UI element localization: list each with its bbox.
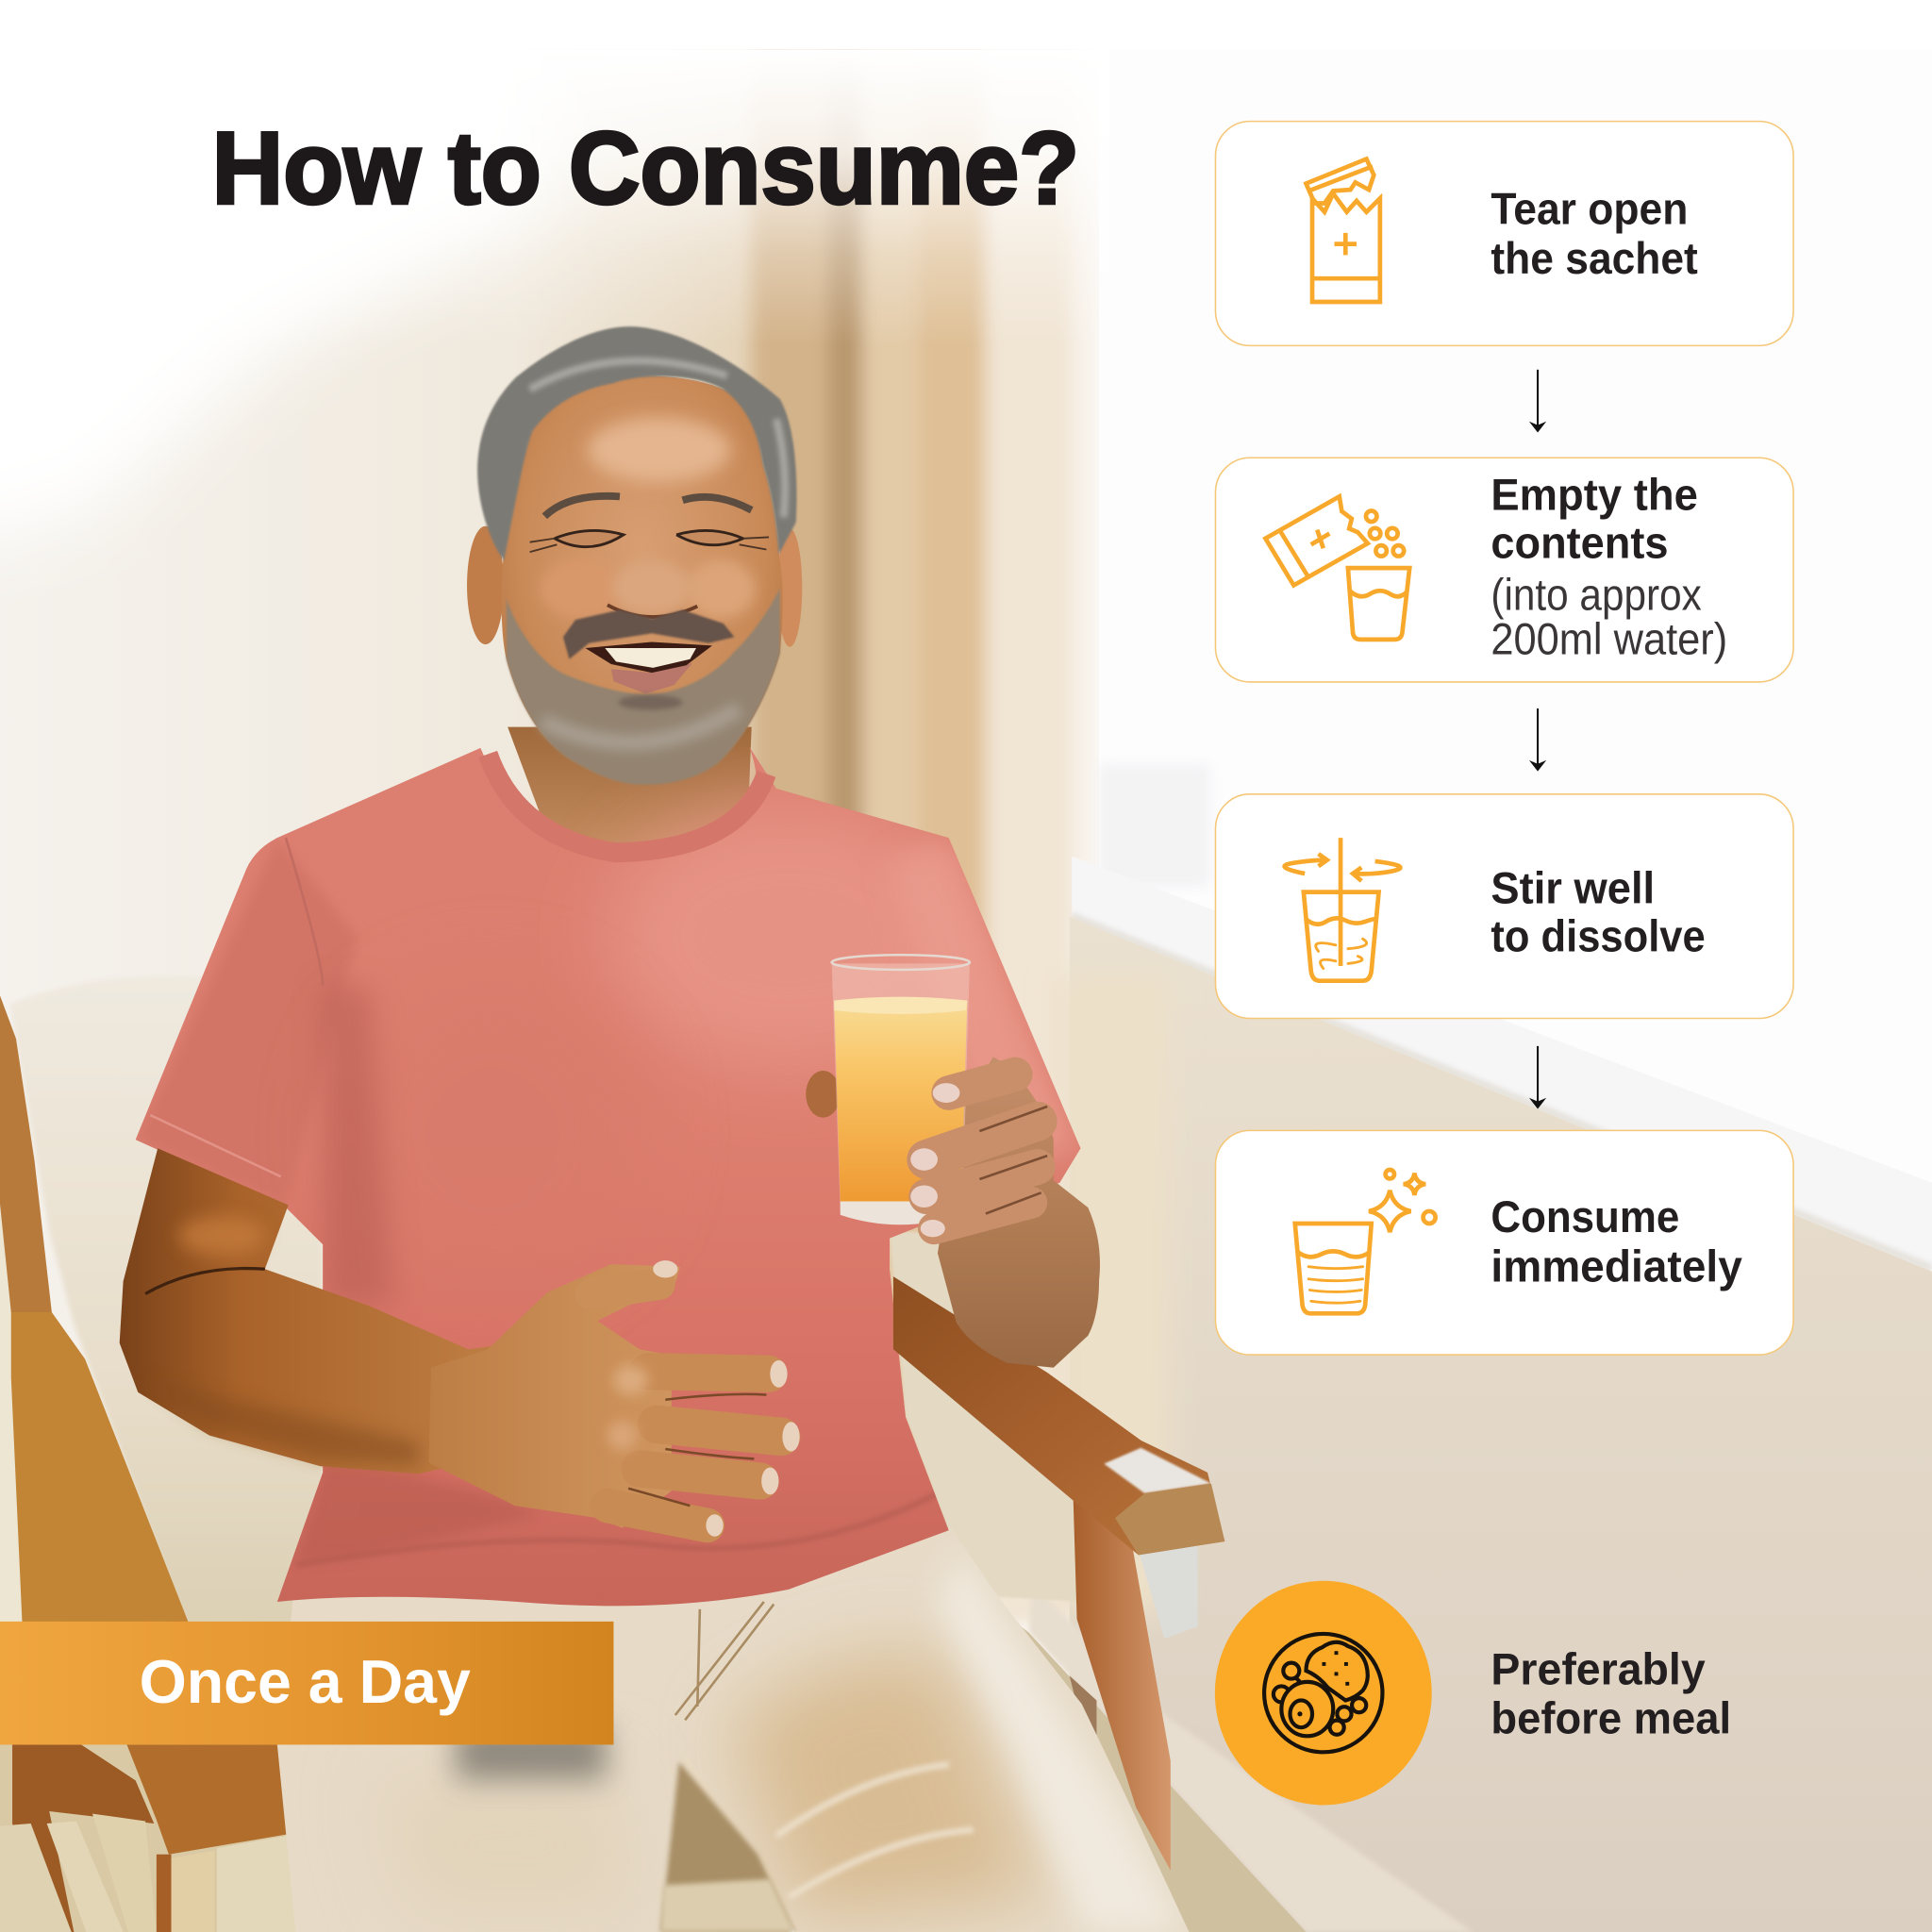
nails [653,1260,800,1537]
cheek highlight [540,559,619,619]
title: How to Consume? [212,111,1079,225]
step text [1491,184,1698,283]
sill edge [1072,912,1932,1274]
icon: glass with sparkles [1295,1170,1436,1313]
head [467,326,802,785]
chair arm right [893,1276,1224,1555]
arrow 3 [1529,1046,1546,1109]
left body shade [323,986,394,1306]
chair back cushion [9,976,323,1626]
meal text: Preferably [1491,1643,1706,1693]
icon: plate of food [1264,1634,1382,1752]
eyebrows [544,496,752,516]
step card 2: empty contents [1215,458,1793,682]
collar [488,754,766,853]
nostril shadow [608,605,697,617]
mouth [585,641,712,673]
man [120,326,1224,1932]
meal text [1491,1643,1731,1743]
arm white highlight [1104,1448,1211,1493]
soul patch [619,695,683,709]
icon: stirring glass [1285,838,1400,981]
left upper arm and forearm [120,1148,518,1474]
step text: (into approx [1491,570,1702,620]
wall shading near chair [1059,974,1171,1614]
nose [612,560,691,615]
forearm shade [148,1380,419,1466]
t-shirt [136,747,1080,1606]
glass [832,955,970,1224]
chair weave [1070,1675,1096,1774]
shoulder seam [286,838,323,986]
chair [0,976,1198,1932]
beard grey [542,708,740,742]
step text: Stir well [1491,862,1655,912]
seat cream [660,1879,794,1932]
left white glow [0,0,542,555]
step card 1: tear open [1215,122,1793,345]
far left cream edge [0,1183,23,1750]
window frame shade [1099,764,1210,887]
meal text: before meal [1491,1693,1731,1743]
banner: once a day [0,1622,613,1744]
right forearm [938,1058,1100,1368]
seat gap [660,1762,794,1932]
knuckle highlights [613,1365,648,1395]
floor [974,1590,1306,1932]
step text: Tear open [1491,184,1688,234]
step text: contents [1491,518,1668,568]
step text: 200ml water) [1491,614,1727,664]
sleeve tone [136,838,358,1208]
neck [508,727,752,858]
pants shading [370,1553,1183,1932]
fingers holding glass [910,1074,1047,1237]
chair lower left wood [0,1744,303,1932]
banner shadow [456,1725,607,1779]
window sill [1072,857,1932,1269]
chair arm left [11,1312,189,1623]
arm end grain [1115,1484,1224,1555]
hand on belly [429,1260,800,1537]
step card 4: consume [1215,1130,1793,1355]
step text: Empty the [1491,470,1698,520]
teeth [605,648,696,668]
step text [1491,862,1706,960]
arrow 2 [1529,708,1546,772]
upper arm glow [178,1216,265,1256]
crow's feet [530,537,769,552]
elbow crease [145,1269,265,1293]
pants [277,1528,1189,1932]
meal badge [1215,1581,1432,1805]
finger gaps [628,1394,766,1506]
beard [507,588,780,785]
forehead highlight [588,418,731,482]
icon: torn sachet [1306,158,1380,302]
chair leg right [1074,1497,1171,1871]
lower shade [295,1466,542,1565]
step text: immediately [1491,1241,1742,1291]
ears [467,526,504,644]
step card 3: stir [1215,794,1793,1019]
window reflection by leg [1140,1541,1198,1639]
step text: the sachet [1491,233,1698,283]
arrow 1 [1529,370,1546,432]
thumb [591,1284,659,1293]
banner: once a day: Once a Day [140,1647,471,1716]
window [1099,0,1932,937]
fingers [608,1372,781,1525]
chest highlight [604,801,974,1072]
chair post [0,995,52,1312]
right cushion behind arm [890,1232,1084,1602]
fly seam [675,1602,774,1720]
baseboard [1029,1583,1473,1932]
eyes [555,530,743,547]
hair [477,326,797,560]
step text [1491,1191,1742,1291]
icon: pouring sachet into glass [1265,496,1409,640]
palm behind glass [806,1071,841,1118]
moustache [563,610,734,659]
step text: to dissolve [1491,910,1706,960]
lower lip [611,663,692,693]
step text: Consume [1491,1191,1679,1241]
left wall [0,49,789,1932]
right wall [1070,917,1932,1932]
hem fold [295,1491,942,1565]
hair highlights [530,360,785,518]
top fade [0,49,1109,345]
right sleeve highlight [887,838,1080,1171]
face [502,375,783,785]
step text [1491,470,1727,664]
curtain [752,0,1099,1626]
belly shade [333,974,653,1293]
sleeve cuff seam [150,1115,281,1176]
